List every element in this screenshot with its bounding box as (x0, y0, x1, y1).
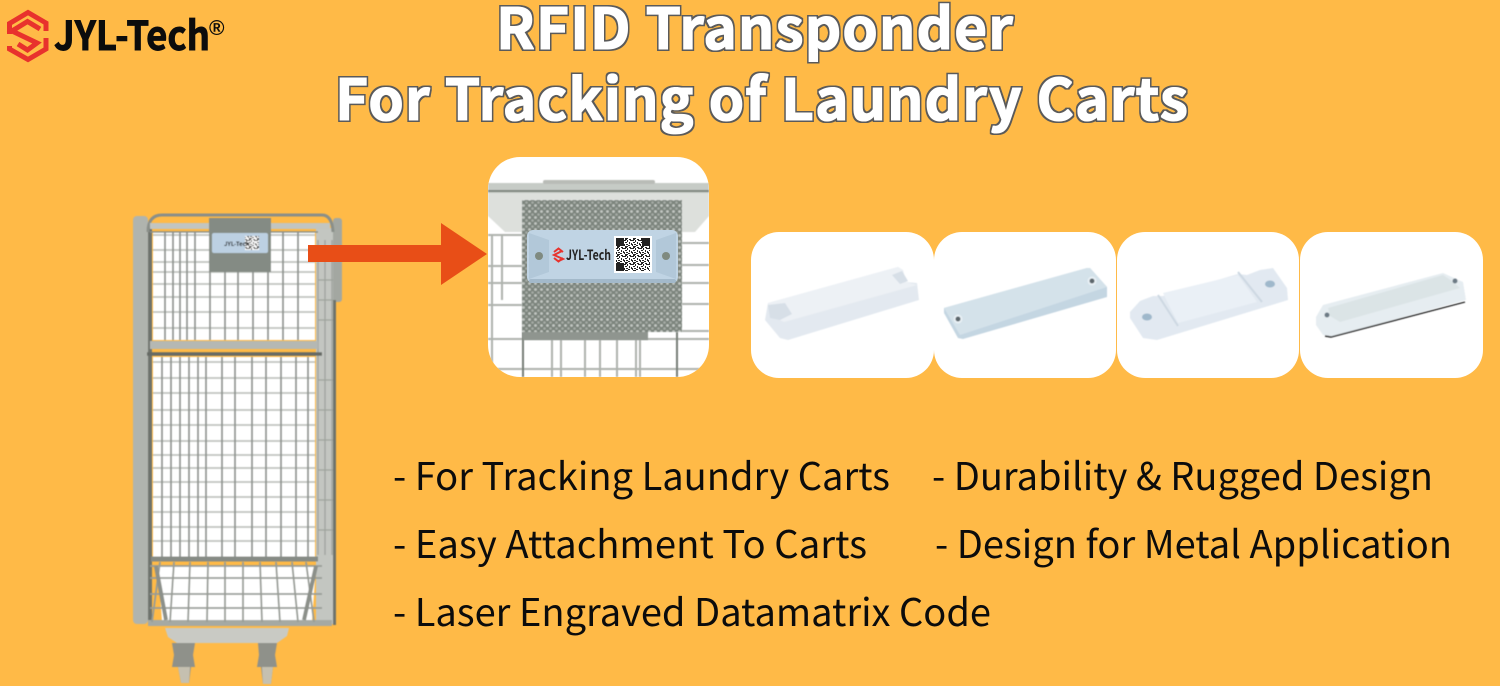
feature: tracking: - For Tracking Laundry Carts (393, 446, 890, 501)
tag logo mark (554, 248, 563, 262)
title line 2: For Tracking of Laundry Carts (335, 55, 1188, 137)
tag QR code (614, 236, 652, 273)
logo wordmark: JYL-Tech (54, 4, 210, 62)
panel: tag close-up photo (488, 157, 709, 377)
RFID tag on plate (527, 230, 678, 283)
product 3 tag body (1130, 268, 1288, 340)
icon: red hexagon S (10, 12, 46, 60)
panel: product 3 (1117, 232, 1299, 378)
logo: JYL-Tech (10, 4, 225, 62)
arrow pointing to tag close-up (308, 223, 487, 285)
cart wire grid (153, 232, 333, 558)
panel: product 4 (1300, 232, 1483, 378)
title (335, 0, 1188, 137)
product 2 tag body (944, 268, 1107, 339)
laundry cart illustration (133, 215, 342, 684)
feature list (393, 446, 1452, 637)
panel: product 1 (751, 232, 934, 378)
cart mesh backing (153, 232, 316, 621)
cart side posts (133, 216, 342, 626)
tag on cart (209, 218, 271, 272)
feature: attachment: - Easy Attachment To Carts (393, 514, 867, 569)
photo wire mesh (488, 235, 709, 377)
tag wordmark: JYL-Tech (566, 245, 611, 265)
product 1 tag body (765, 267, 919, 340)
product 4 tag body (1316, 273, 1466, 337)
feature: datamatrix: - Laser Engraved Datamatrix Code (393, 582, 991, 637)
panel: product 2 (934, 232, 1116, 378)
registered mark: ® (209, 17, 225, 40)
cart base shelf (150, 562, 322, 622)
feature: metal application: - Design for Metal Application (935, 514, 1452, 569)
photo top rail (488, 180, 709, 232)
feature: durability: - Durability & Rugged Design (932, 446, 1433, 501)
perforated plate (522, 200, 682, 340)
cart frame (147, 215, 333, 623)
cart wheels and base (165, 628, 289, 684)
tag on cart: JYL-Tech (224, 239, 250, 248)
